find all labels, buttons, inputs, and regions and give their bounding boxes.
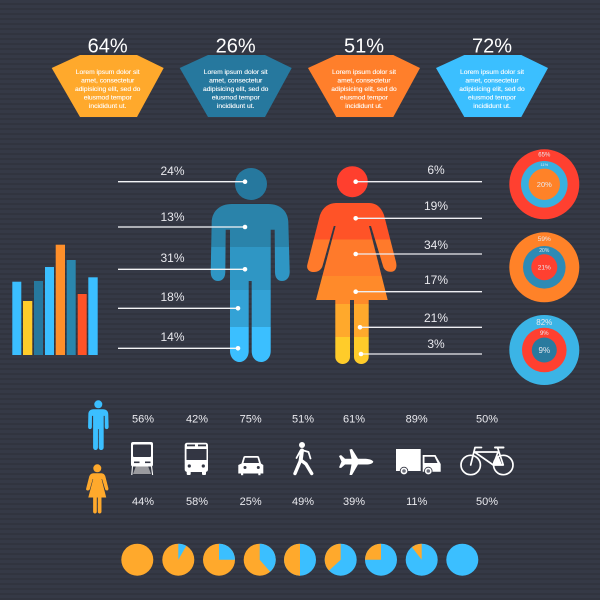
panel: orange stat 64%: amet, consectetur: [81, 77, 135, 84]
panel: deep orange stat 51%: adipisicing elit, sed do: [331, 86, 397, 93]
icon: airplane: [339, 449, 373, 475]
transport percentages: women: 50%: [476, 496, 498, 508]
transport percentages: women: 44%: [132, 496, 154, 508]
donut chart: 59 / 20 / 21: [509, 232, 579, 302]
woman figure: [307, 166, 396, 364]
panel: teal stat 26%: incididunt ut.: [217, 103, 255, 110]
transport percentages: men: 89%: [406, 414, 428, 426]
panel: teal stat 26%: [180, 36, 292, 117]
donut chart: 82 / 9 / 9: 9%: [539, 346, 550, 355]
donut chart: 59 / 20 / 21: 21%: [538, 265, 551, 272]
transport percentages: men: [132, 414, 498, 426]
icon: pedestrian: [295, 442, 312, 474]
man percentage callouts: 24%: [160, 164, 185, 178]
man percentage callouts: 18%: [160, 290, 185, 304]
donut chart: 65 / 11 / 20: 20%: [537, 180, 552, 189]
icon: small man: [88, 400, 109, 450]
panel: deep orange stat 51%: Lorem ipsum dolor sit: [332, 69, 396, 76]
donut chart: 82 / 9 / 9: [509, 315, 579, 385]
panel: orange stat 64%: incididunt ut.: [89, 103, 127, 110]
transport percentages: women: 49%: [292, 496, 314, 508]
woman percentage callouts: 3%: [427, 337, 445, 351]
icon: bus: [185, 443, 208, 475]
panel: deep orange stat 51%: [308, 36, 420, 117]
pie row: [121, 544, 478, 576]
transport percentages: men: 50%: [476, 414, 498, 426]
transport percentages: women: 11%: [406, 496, 428, 508]
woman percentage callouts: 21%: [424, 311, 448, 325]
panel: deep orange stat 51%: amet, consectetur: [337, 77, 391, 84]
panel: sky blue stat 72%: amet, consectetur: [465, 77, 519, 84]
panel: orange stat 64%: eiusmod tempor: [84, 94, 132, 101]
transport percentages: men: 75%: [240, 414, 262, 426]
donut chart: 65 / 11 / 20: 11%: [540, 162, 549, 167]
man figure: [211, 168, 290, 362]
icon: delivery truck: [396, 449, 441, 475]
panel: teal stat 26%: amet, consectetur: [209, 77, 263, 84]
man percentage callouts: 13%: [160, 210, 185, 224]
panel: sky blue stat 72%: incididunt ut.: [473, 103, 511, 110]
panel: sky blue stat 72%: [436, 36, 548, 117]
transport percentages: men: 42%: [186, 414, 208, 426]
panel: sky blue stat 72%: adipisicing elit, sed do: [459, 86, 525, 93]
transport percentages: men: 56%: [132, 414, 154, 426]
woman percentage callouts: [353, 163, 482, 356]
transport percentages: women: [132, 496, 498, 508]
panel: sky blue stat 72%: eiusmod tempor: [468, 94, 517, 101]
panel: deep orange stat 51%: eiusmod tempor: [340, 94, 389, 101]
woman percentage callouts: 17%: [424, 273, 448, 287]
panel: teal stat 26%: 26%: [216, 36, 256, 58]
panel: sky blue stat 72%: Lorem ipsum dolor sit: [460, 69, 524, 76]
donut chart: 82 / 9 / 9: 9%: [540, 331, 549, 337]
panel: orange stat 64%: Lorem ipsum dolor sit: [76, 69, 140, 76]
man percentage callouts: 31%: [160, 251, 185, 265]
donut chart: 65 / 11 / 20: [509, 149, 579, 219]
transport percentages: men: 51%: [292, 414, 314, 426]
woman percentage callouts: 19%: [424, 199, 448, 213]
icon: train: [131, 442, 153, 475]
panel: deep orange stat 51%: incididunt ut.: [345, 103, 383, 110]
donut chart: 65 / 11 / 20: 65%: [538, 152, 551, 158]
bar chart: [12, 245, 98, 355]
panel: orange stat 64%: adipisicing elit, sed do: [75, 86, 141, 93]
panel: sky blue stat 72%: 72%: [472, 36, 512, 58]
panel: teal stat 26%: adipisicing elit, sed do: [203, 86, 269, 93]
woman percentage callouts: 6%: [427, 163, 445, 177]
panel: deep orange stat 51%: 51%: [344, 36, 384, 58]
transport percentages: women: 25%: [240, 496, 262, 508]
transport percentages: men: 61%: [343, 414, 365, 426]
donut chart: 82 / 9 / 9: 82%: [536, 318, 552, 327]
icon: small woman: [86, 464, 108, 514]
icon: bicycle: [461, 448, 513, 475]
transport percentages: women: 58%: [186, 496, 208, 508]
donut chart: 59 / 20 / 21: 59%: [538, 236, 551, 243]
man percentage callouts: 14%: [160, 330, 185, 344]
panel: teal stat 26%: Lorem ipsum dolor sit: [204, 69, 268, 76]
woman percentage callouts: 34%: [424, 238, 448, 252]
panel: teal stat 26%: eiusmod tempor: [212, 94, 260, 101]
man percentage callouts: [118, 164, 247, 351]
donut chart: 59 / 20 / 21: 20%: [539, 248, 550, 254]
panel: orange stat 64%: 64%: [88, 36, 128, 58]
panel: orange stat 64%: [52, 36, 164, 117]
transport percentages: women: 39%: [343, 496, 365, 508]
icon: car: [238, 456, 263, 475]
